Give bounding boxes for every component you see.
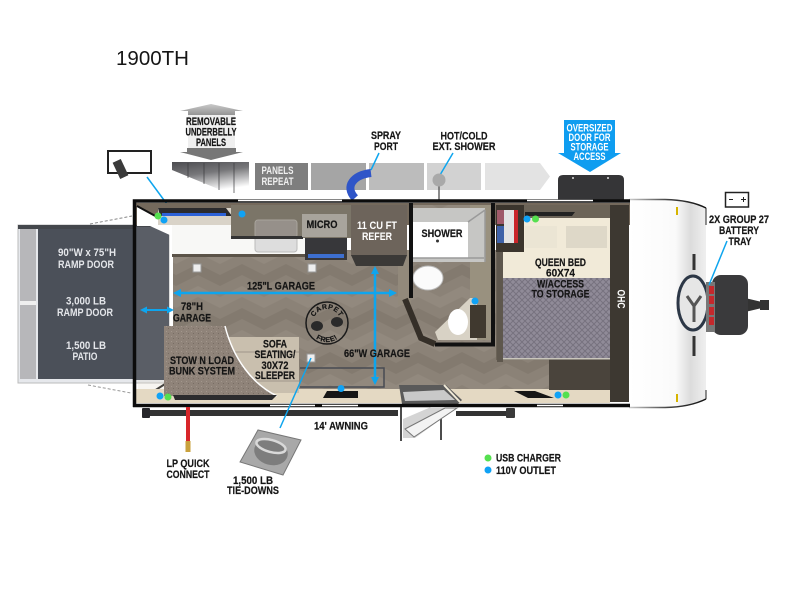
garage dimensions: 66"W GARAGE — [344, 348, 410, 360]
icon: down arrow — [180, 148, 243, 160]
refrigerator: REFER — [362, 231, 392, 243]
callout text: REMOVABLE — [186, 116, 236, 128]
tie-down callout: TIE-DOWNS — [227, 485, 279, 497]
overhead cabinets — [231, 205, 351, 238]
title: 1900TH — [116, 48, 189, 70]
tie-down callout: 1,500 LB — [233, 475, 273, 487]
underbelly panel strip — [172, 162, 550, 193]
bathroom sink — [435, 298, 486, 340]
wardrobe — [496, 205, 524, 252]
icon: up arrow — [180, 104, 243, 116]
bottom counter — [136, 389, 610, 403]
ramp text: 1,500 LB — [66, 340, 106, 352]
refrigerator — [351, 205, 407, 266]
callout text: PANELS — [196, 137, 226, 149]
spray port label — [371, 130, 402, 170]
lp quick connect: CONNECT — [166, 469, 210, 481]
refrigerator: 11 CU FT — [357, 220, 397, 232]
bench outline — [300, 368, 384, 387]
sofa: SOFA — [263, 338, 287, 350]
oversized door callout: DOOR FOR — [568, 132, 611, 144]
tie-down callout — [227, 358, 311, 497]
ramp text: RAMP DOOR — [58, 259, 114, 271]
battery icon and label: BATTERY — [719, 225, 760, 237]
carpet free stamp — [305, 301, 349, 345]
sofa: SLEEPER — [255, 370, 295, 382]
callout text: UNDERBELLY — [186, 126, 237, 138]
ramp text — [57, 247, 116, 363]
icon: tv with remote — [108, 151, 172, 211]
icon: shower head — [432, 174, 446, 200]
bed: TO STORAGE — [532, 288, 590, 300]
panel: panels repeat: PANELS — [262, 165, 294, 177]
sofa — [229, 337, 299, 393]
tie-down rings — [193, 264, 316, 362]
carpet free stamp: FREE! — [316, 334, 338, 342]
overhead cabinet — [610, 205, 629, 402]
hot cold shower label — [432, 130, 496, 175]
panel: bathroom: SHOWER — [422, 228, 463, 240]
lp quick connect: LP QUICK — [166, 458, 210, 470]
tan strip beside refrigerator — [398, 250, 411, 305]
battery icon and label: 2X GROUP 27 — [709, 214, 769, 226]
garage dimensions — [140, 266, 410, 385]
callout text — [186, 116, 237, 149]
garage left well — [136, 227, 169, 380]
battery icon and label — [709, 192, 769, 285]
spray port label: PORT — [374, 141, 398, 153]
sofa: SEATING/ — [254, 349, 296, 361]
entry door threshold — [399, 385, 462, 404]
garage dimensions: GARAGE — [173, 312, 211, 324]
awning: 14' AWNING — [314, 420, 368, 432]
stove — [305, 238, 347, 260]
arrow: 66 inch width — [371, 266, 379, 385]
panel: dark fading section — [172, 162, 249, 193]
bed — [503, 218, 610, 360]
legend: USB CHARGER — [496, 452, 561, 464]
ramp text: RAMP DOOR — [57, 307, 113, 319]
entry steps — [401, 407, 458, 441]
outer walls — [133, 201, 630, 407]
oversized door callout: ACCESS — [574, 151, 606, 163]
oversized door callout — [558, 120, 621, 172]
ramp text: PATIO — [72, 351, 98, 363]
garage dimensions: 125"L GARAGE — [247, 280, 315, 292]
panel: panels repeat: REPEAT — [262, 176, 294, 188]
ramp text: 90"W x 75"H — [58, 247, 116, 259]
hot cold shower label: EXT. SHOWER — [432, 141, 496, 153]
arrow: 78 inch height — [140, 306, 174, 314]
storage door — [558, 175, 624, 200]
toilet — [413, 266, 443, 290]
floor vents — [323, 391, 554, 398]
garage dimensions: 78"H — [181, 301, 203, 313]
microwave — [302, 214, 347, 237]
bunk system: BUNK SYSTEM — [169, 366, 235, 378]
sofa: 30X72 — [262, 360, 288, 372]
bed: 60X74 — [546, 268, 576, 280]
arrow: 125 inch length — [173, 289, 397, 297]
icon: spray hose — [350, 173, 371, 198]
legend: 110V OUTLET — [496, 465, 556, 477]
lp quick connect — [166, 407, 210, 481]
galley counter — [158, 208, 307, 257]
carpet free stamp: CARPET — [311, 304, 344, 316]
bed: W/ACCESS — [537, 278, 584, 290]
battery icon and label: TRAY — [728, 236, 752, 248]
removable underbelly panels callout — [180, 104, 243, 160]
bed: QUEEN BED — [535, 257, 586, 269]
batteries — [709, 286, 714, 325]
ramp text: 3,000 LB — [66, 296, 106, 308]
icon: tie-down — [240, 430, 301, 475]
bunk system — [164, 326, 277, 400]
upper interior band — [136, 203, 630, 225]
panel: panels repeat — [255, 163, 308, 190]
floor — [172, 250, 550, 390]
outlet and usb dots — [154, 210, 570, 400]
panel: bedroom — [496, 205, 629, 402]
hot cold shower label: HOT/COLD — [440, 130, 488, 142]
overhead cabinet: OHC — [614, 290, 626, 309]
oversized door callout: OVERSIZED — [566, 122, 613, 134]
legend — [484, 452, 561, 477]
logo — [678, 254, 708, 356]
front cap — [629, 199, 708, 408]
panel: ramp door — [18, 216, 169, 393]
spray port label: SPRAY — [371, 130, 402, 142]
tongue and batteries — [706, 275, 769, 335]
panel: interior floor plan — [132, 199, 630, 408]
tv and blue light — [158, 208, 232, 216]
bunk system: STOW N LOAD — [170, 355, 234, 367]
awning — [142, 408, 515, 432]
sink — [255, 232, 297, 252]
oversized door callout: STORAGE — [570, 142, 608, 154]
bathroom walls — [411, 203, 495, 346]
microwave: MICRO — [306, 219, 338, 231]
panel: bathroom — [413, 205, 493, 345]
